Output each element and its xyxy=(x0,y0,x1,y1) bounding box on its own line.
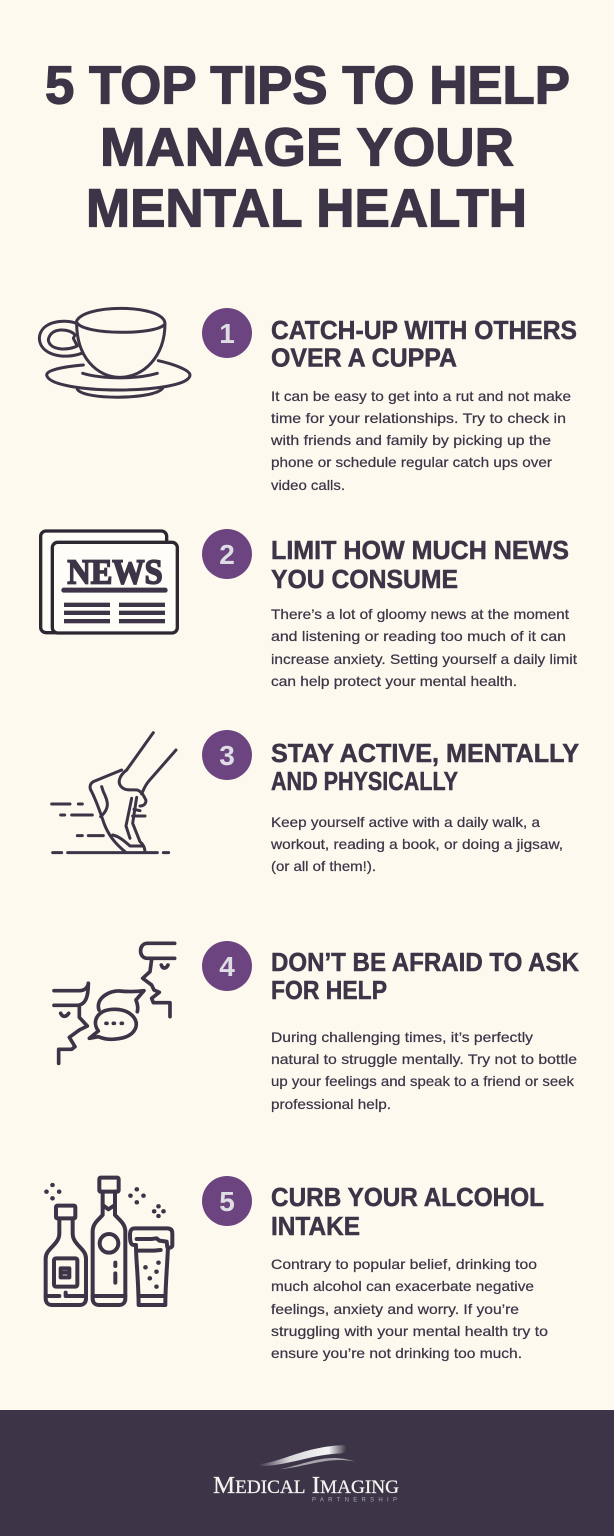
text block 1 xyxy=(270,389,571,493)
number badge 4 xyxy=(202,941,252,991)
text block 5: struggling with your mental health try to xyxy=(271,1324,548,1339)
number badge 2 xyxy=(202,529,252,579)
text block 1: phone or schedule regular catch ups over xyxy=(271,455,553,470)
number badge 4: 4 xyxy=(219,951,235,982)
heading 1 xyxy=(271,317,577,372)
icon: bottles and beer glass xyxy=(46,1178,172,1305)
icon: running shoe xyxy=(52,733,176,853)
number badge 2: 2 xyxy=(219,539,235,570)
logo: Medical Imaging Partnership: MEDICAL IMAGING xyxy=(213,1473,399,1499)
text block 4: natural to struggle mentally. Try not to bottle xyxy=(271,1052,577,1067)
text block 2: can help protect your mental health. xyxy=(271,674,517,689)
number badge 5: 5 xyxy=(219,1186,235,1217)
icon: two people talking xyxy=(54,943,175,1063)
heading 5: INTAKE xyxy=(271,1213,360,1241)
text block 3: workout, reading a book, or doing a jigsaw, xyxy=(270,837,563,852)
heading 3: STAY ACTIVE, MENTALLY xyxy=(271,740,579,768)
text block 5: feelings, anxiety and worry. If you’re xyxy=(271,1302,519,1317)
heading 5 xyxy=(271,1184,544,1241)
title: 5 TOP TIPS TO HELP xyxy=(45,56,570,116)
number badge 3 xyxy=(202,730,252,780)
text block 4: up your feelings and speak to a friend or seek xyxy=(271,1074,574,1089)
heading 1: OVER A CUPPA xyxy=(271,344,457,372)
heading 2 xyxy=(271,537,569,594)
logo: Medical Imaging Partnership xyxy=(213,1445,399,1504)
text block 1: with friends and family by picking up the xyxy=(270,433,551,448)
heading 1: CATCH-UP WITH OTHERS xyxy=(271,317,577,345)
text block 2 xyxy=(271,607,577,689)
number badge 1: 1 xyxy=(219,318,235,349)
text block 2: There’s a lot of gloomy news at the moment xyxy=(271,607,569,622)
text block 1: video calls. xyxy=(271,478,345,493)
heading 4: DON’T BE AFRAID TO ASK xyxy=(271,949,580,977)
title xyxy=(45,56,570,239)
title: MENTAL HEALTH xyxy=(86,179,527,239)
text block 4: During challenging times, it’s perfectly xyxy=(271,1030,533,1045)
text block 4 xyxy=(271,1030,577,1112)
text block 3: Keep yourself active with a daily walk, a xyxy=(271,815,540,830)
icon: newspaper: NEWS xyxy=(67,553,163,591)
text block 2: and listening or reading too much of it can xyxy=(271,629,566,644)
text block 5: much alcohol can exacerbate negative xyxy=(271,1279,534,1294)
heading 3: AND PHYSICALLY xyxy=(271,768,458,796)
text block 5: Contrary to popular belief, drinking too xyxy=(271,1257,537,1272)
icon: coffee cup xyxy=(39,308,190,397)
number badge 5 xyxy=(202,1176,252,1226)
title: MANAGE YOUR xyxy=(100,117,514,177)
text block 3 xyxy=(270,815,563,874)
text block 3: (or all of them!). xyxy=(271,859,376,874)
text block 4: professional help. xyxy=(271,1097,391,1112)
heading 4: FOR HELP xyxy=(271,977,387,1005)
number badge 1 xyxy=(202,308,252,358)
logo: Medical Imaging Partnership: PARTNERSHIP xyxy=(312,1498,397,1504)
footer band xyxy=(0,1410,614,1536)
icon: newspaper xyxy=(41,531,177,633)
heading 5: CURB YOUR ALCOHOL xyxy=(271,1184,544,1212)
text block 1: It can be easy to get into a rut and not make xyxy=(271,389,571,404)
text block 5 xyxy=(271,1257,548,1361)
number badge 3: 3 xyxy=(219,740,235,771)
heading 2: LIMIT HOW MUCH NEWS xyxy=(271,537,569,565)
text block 5: ensure you’re not drinking too much. xyxy=(271,1346,522,1361)
text block 1: time for your relationships. Try to check in xyxy=(271,411,566,426)
heading 4 xyxy=(271,949,580,1005)
text block 2: increase anxiety. Setting yourself a daily limit xyxy=(271,652,577,667)
heading 3 xyxy=(271,740,579,796)
heading 2: YOU CONSUME xyxy=(271,566,458,594)
